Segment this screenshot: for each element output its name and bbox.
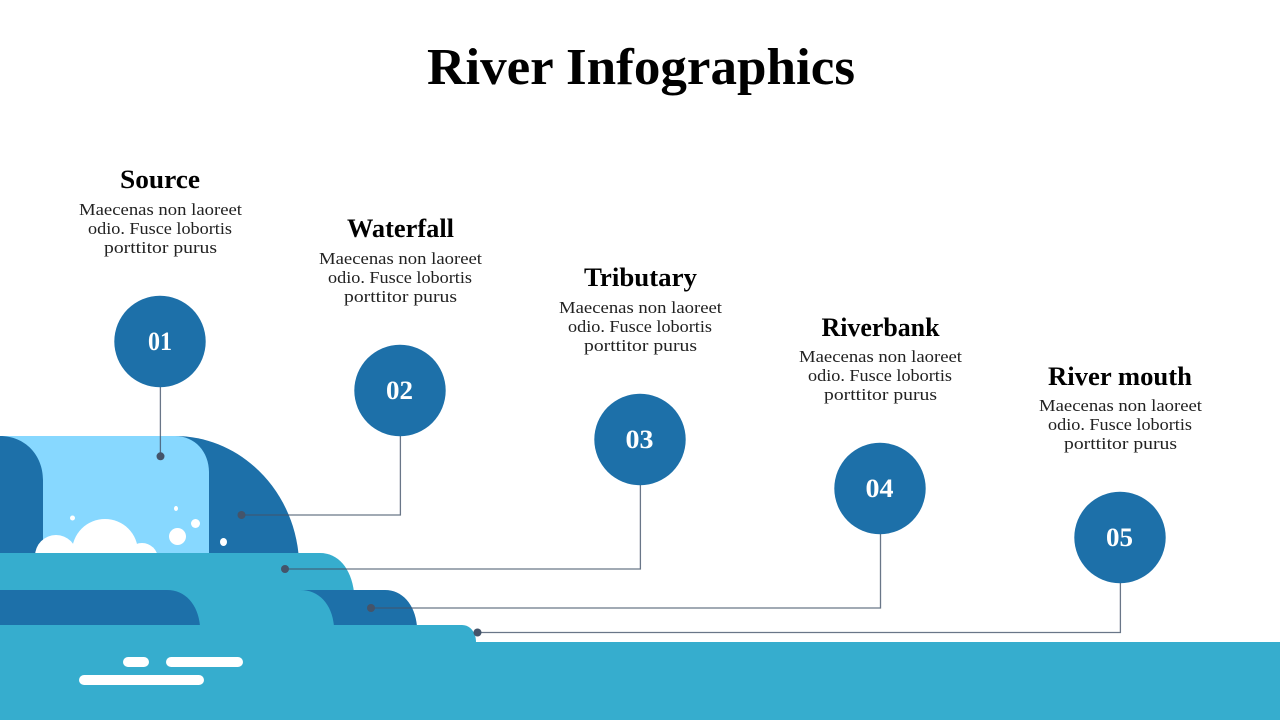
step 1: Source bbox=[79, 165, 242, 460]
step 4: Riverbank bbox=[367, 313, 962, 612]
step 2: Waterfall bbox=[238, 214, 482, 519]
number badge bbox=[594, 394, 686, 485]
waterfall water bbox=[0, 436, 209, 560]
number badge: 04 bbox=[866, 474, 894, 503]
description bbox=[799, 347, 962, 404]
description: odio. Fusce lobortis bbox=[328, 268, 472, 287]
foam bbox=[35, 506, 227, 585]
heading: Source bbox=[120, 165, 200, 194]
upper river layer bbox=[0, 553, 354, 630]
number badge: 02 bbox=[386, 376, 413, 405]
description bbox=[1039, 396, 1202, 453]
description: Maecenas non laoreet bbox=[79, 200, 242, 219]
description bbox=[319, 249, 482, 306]
description: Maecenas non laoreet bbox=[559, 298, 722, 317]
description: porttitor purus bbox=[104, 238, 217, 257]
description bbox=[79, 200, 242, 257]
number badge bbox=[354, 345, 446, 436]
heading: River mouth bbox=[1048, 362, 1193, 391]
description: odio. Fusce lobortis bbox=[88, 219, 232, 238]
description: odio. Fusce lobortis bbox=[1048, 415, 1192, 434]
number badge bbox=[834, 443, 926, 534]
connector bbox=[238, 436, 400, 519]
title: River Infographics bbox=[427, 39, 855, 96]
middle bank right bbox=[300, 590, 417, 626]
description: Maecenas non laoreet bbox=[799, 347, 962, 366]
lower river bbox=[0, 625, 1280, 720]
description: porttitor purus bbox=[824, 385, 937, 404]
description: Maecenas non laoreet bbox=[1039, 396, 1202, 415]
description: odio. Fusce lobortis bbox=[568, 317, 712, 336]
heading: Waterfall bbox=[347, 214, 454, 243]
connector bbox=[367, 534, 880, 612]
description: porttitor purus bbox=[1064, 434, 1177, 453]
water ripples bbox=[79, 657, 243, 685]
step 5: River mouth bbox=[474, 362, 1202, 636]
number badge: 01 bbox=[148, 327, 172, 356]
description: Maecenas non laoreet bbox=[319, 249, 482, 268]
middle bank left bbox=[0, 590, 200, 626]
river illustration bbox=[0, 436, 1280, 720]
connector bbox=[281, 485, 640, 573]
description bbox=[559, 298, 722, 355]
number badge: 05 bbox=[1106, 523, 1133, 552]
connector bbox=[156, 387, 164, 460]
number badge bbox=[1074, 492, 1166, 583]
heading: Riverbank bbox=[822, 313, 940, 342]
description: porttitor purus bbox=[584, 336, 697, 355]
number badge: 03 bbox=[626, 425, 654, 454]
waterfall hill bbox=[0, 436, 299, 560]
description: odio. Fusce lobortis bbox=[808, 366, 952, 385]
step 3: Tributary bbox=[281, 263, 722, 573]
connector bbox=[474, 583, 1120, 636]
number badge bbox=[114, 296, 206, 387]
heading: Tributary bbox=[584, 263, 697, 292]
description: porttitor purus bbox=[344, 287, 457, 306]
